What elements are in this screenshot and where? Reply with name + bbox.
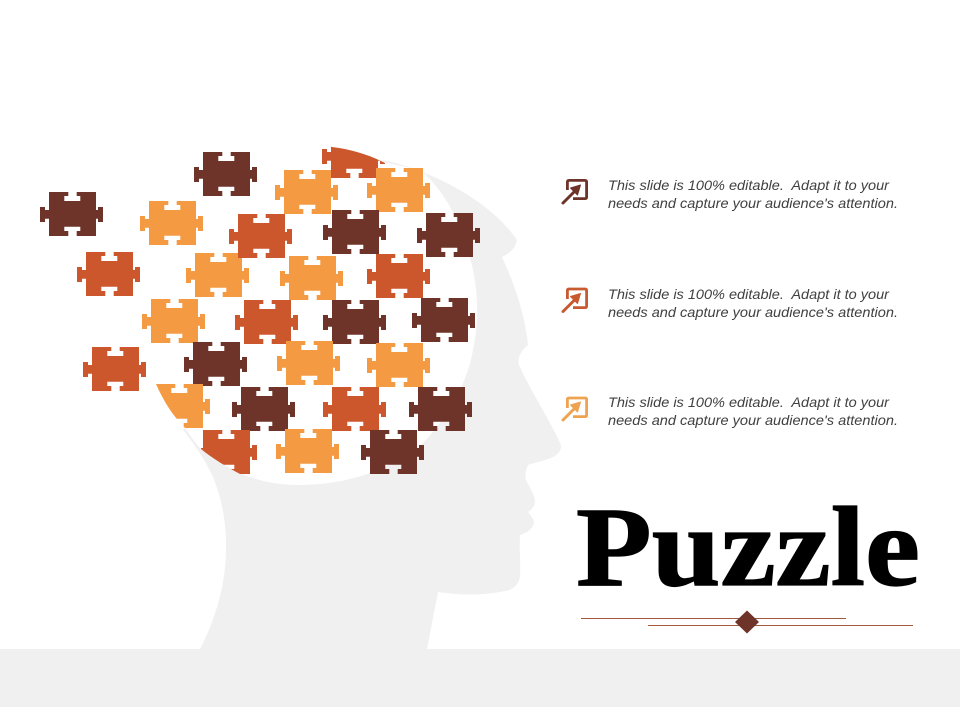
icon: arrow in box xyxy=(563,180,587,203)
piece clipped by head xyxy=(201,430,257,474)
piece xyxy=(140,201,203,245)
list item 1 xyxy=(563,177,898,211)
piece xyxy=(83,347,146,391)
bottom band xyxy=(0,649,960,707)
piece xyxy=(276,429,339,473)
icon: arrow in box xyxy=(563,398,587,420)
text block: This slide is 100% editable. Adapt it to your xyxy=(608,394,890,410)
text block: needs and capture your audience's attention. xyxy=(608,412,898,428)
text block xyxy=(608,177,898,211)
text block xyxy=(608,394,898,428)
piece xyxy=(275,170,338,214)
piece xyxy=(232,387,295,431)
text block xyxy=(608,286,898,320)
piece xyxy=(280,256,343,300)
piece xyxy=(142,299,205,343)
text block: This slide is 100% editable. Adapt it to your xyxy=(608,286,890,302)
list item 3 xyxy=(563,394,898,428)
text block: needs and capture your audience's attention. xyxy=(608,195,898,211)
icon: arrow in box xyxy=(563,289,587,312)
piece xyxy=(361,430,424,474)
piece xyxy=(323,210,386,254)
piece clipped by head xyxy=(322,146,385,178)
piece xyxy=(77,252,140,296)
white brain area xyxy=(150,100,477,485)
text block: needs and capture your audience's attention. xyxy=(608,304,898,320)
piece xyxy=(235,300,298,344)
text block: This slide is 100% editable. Adapt it to your xyxy=(608,177,890,193)
piece xyxy=(367,343,430,387)
piece xyxy=(194,152,257,196)
piece xyxy=(277,341,340,385)
piece clipped by head xyxy=(156,384,210,428)
piece xyxy=(409,387,472,431)
piece xyxy=(184,342,247,386)
piece xyxy=(229,214,292,258)
piece xyxy=(417,213,480,257)
piece xyxy=(40,192,103,236)
title divider with diamond xyxy=(581,610,913,634)
piece xyxy=(367,254,430,298)
piece xyxy=(323,300,386,344)
piece xyxy=(323,387,386,431)
title: Puzzle xyxy=(576,485,920,610)
piece xyxy=(186,253,249,297)
piece xyxy=(412,298,475,342)
puzzle pieces xyxy=(40,134,480,474)
list item 2 xyxy=(563,286,898,320)
head silhouette xyxy=(183,160,561,649)
piece xyxy=(367,168,430,212)
